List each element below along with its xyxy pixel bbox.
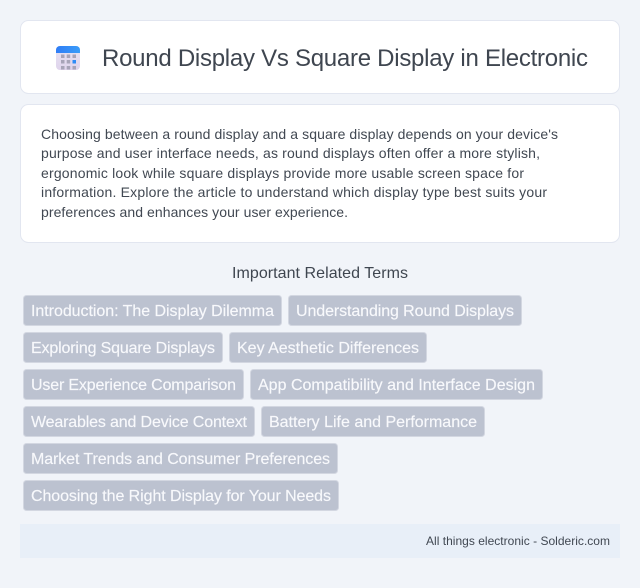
tag: market trends: [24, 444, 338, 474]
tag: market trends: Market Trends and Consumer Preferences: [31, 451, 330, 468]
tag list: [24, 296, 542, 510]
tag: exploring square displays: Exploring Square Displays: [31, 340, 215, 357]
text block: introduction paragraph: Choosing between a round display and a square display depends on your device's: [41, 126, 558, 142]
footer credit: All things electronic - Solderic.com: [426, 534, 610, 548]
text block: introduction paragraph: purpose and user interface needs, as round displays often offer a more stylish,: [41, 145, 540, 161]
text block: introduction paragraph: information. Explore the article to understand which display type best suits your: [41, 184, 547, 200]
tag: user experience comparison: [24, 370, 244, 400]
tag: understanding round displays: [288, 296, 522, 326]
tag: key aesthetic differences: [230, 332, 426, 362]
tag: battery life: Battery Life and Performance: [269, 414, 477, 431]
tag: understanding round displays: Understanding Round Displays: [296, 303, 514, 320]
tag: app compatibility: App Compatibility and Interface Design: [258, 377, 535, 394]
tag: choosing the right display: [24, 480, 338, 510]
tag: choosing the right display: Choosing the Right Display for Your Needs: [31, 488, 331, 505]
footer: [20, 524, 620, 558]
tag: wearables: [24, 406, 254, 436]
tag: key aesthetic differences: Key Aesthetic Differences: [237, 340, 419, 357]
tag: app compatibility: [250, 370, 542, 400]
tag: wearables: Wearables and Device Context: [31, 414, 248, 431]
panel: introduction: [20, 104, 620, 242]
text block: introduction paragraph: [41, 126, 558, 220]
title: Round Display Vs Square Display in Electronic: [102, 45, 588, 72]
tag: exploring square displays: [24, 332, 222, 362]
tag: introduction: Introduction: The Display Dilemma: [31, 303, 274, 320]
tag: user experience comparison: User Experience Comparison: [31, 377, 236, 394]
tag: introduction: [24, 296, 282, 326]
text block: introduction paragraph: ergonomic look while square displays provide more usable screen space for: [41, 165, 524, 181]
heading: important related terms: Important Related Terms: [232, 265, 408, 282]
panel: title card: [20, 20, 620, 94]
text block: introduction paragraph: preferences and enhances your user experience.: [41, 204, 348, 220]
tag: battery life: [262, 406, 484, 436]
icon: calendar: [56, 46, 80, 70]
